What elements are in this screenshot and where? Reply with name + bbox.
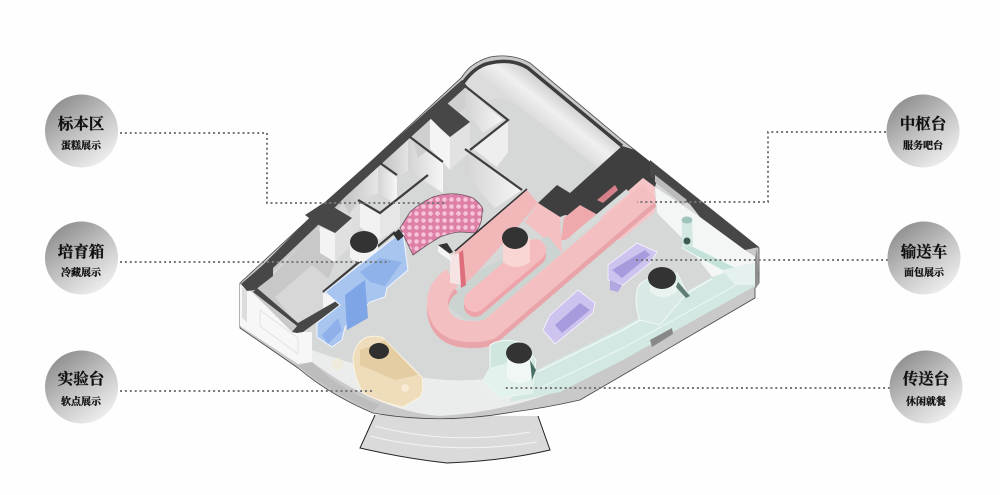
leader line: conveyor cart <box>633 259 888 261</box>
teal conveyor band <box>510 245 759 402</box>
dark perimeter wall, upper left <box>241 80 470 333</box>
aisle rooms and wall faces <box>320 118 470 262</box>
label: specimen zone <box>45 94 118 168</box>
label: central counter <box>886 94 960 168</box>
yellow tasting station <box>353 336 423 407</box>
label: lab bench <box>45 350 118 424</box>
teal column at right <box>682 216 693 248</box>
pink dotted curved wall <box>400 194 483 255</box>
pink service block <box>450 178 655 285</box>
label: conveyor table <box>890 350 962 424</box>
leader line: conveyor table <box>503 387 890 389</box>
thin interior walls <box>323 86 522 292</box>
channel around pink pill <box>448 236 562 321</box>
label: incubator: 培育箱 <box>58 242 105 261</box>
label: specimen zone: 蛋糕展示 <box>61 139 102 152</box>
label: conveyor cart: 输送车 <box>901 242 948 261</box>
entrance steps <box>360 415 550 463</box>
counter channel <box>572 191 628 238</box>
label: conveyor cart <box>888 222 960 294</box>
label: central counter: 中枢台 <box>900 114 947 133</box>
pillar column top left <box>350 231 378 262</box>
teal machine with bread <box>636 267 690 325</box>
upper-right room curved wall <box>466 62 622 167</box>
label: central counter: 服务吧台 <box>903 139 944 152</box>
teal machine at conveyor <box>483 341 536 398</box>
label: lab bench: 实验台 <box>58 370 105 388</box>
building base <box>240 56 759 419</box>
purple display A <box>608 243 657 292</box>
upper-right room inner walls <box>447 88 522 208</box>
purple display B <box>543 290 595 344</box>
dark wall, upper right <box>650 160 759 250</box>
blue refrigerated zone <box>317 229 408 347</box>
pink divider at U opening <box>438 243 466 288</box>
label: conveyor cart: 面包展示 <box>904 266 945 279</box>
label: incubator: 冷藏展示 <box>61 266 102 279</box>
label: conveyor table: 休闲就餐 <box>906 395 946 408</box>
pink central pill and column <box>475 227 535 306</box>
dark mass behind pink counter <box>538 146 660 218</box>
leader line: lab bench <box>120 390 373 392</box>
label: incubator <box>45 222 118 294</box>
label: specimen zone: 标本区 <box>58 114 105 133</box>
label: conveyor table: 传送台 <box>903 370 950 388</box>
pink U-shaped conveyor counter <box>437 192 650 338</box>
illustrated floor plan <box>240 56 759 463</box>
leader line: incubator <box>120 261 390 263</box>
leader line: specimen zone <box>120 133 447 203</box>
left outer white wall <box>240 284 380 411</box>
label: lab bench: 软点展示 <box>61 395 102 408</box>
left room <box>255 228 338 325</box>
floor: gray interior <box>253 62 745 380</box>
leader line: central counter <box>637 132 886 202</box>
curved top wall <box>463 61 622 146</box>
small round stool <box>331 358 343 370</box>
right white wall <box>655 187 757 277</box>
floor: light perimeter apron <box>312 277 745 416</box>
